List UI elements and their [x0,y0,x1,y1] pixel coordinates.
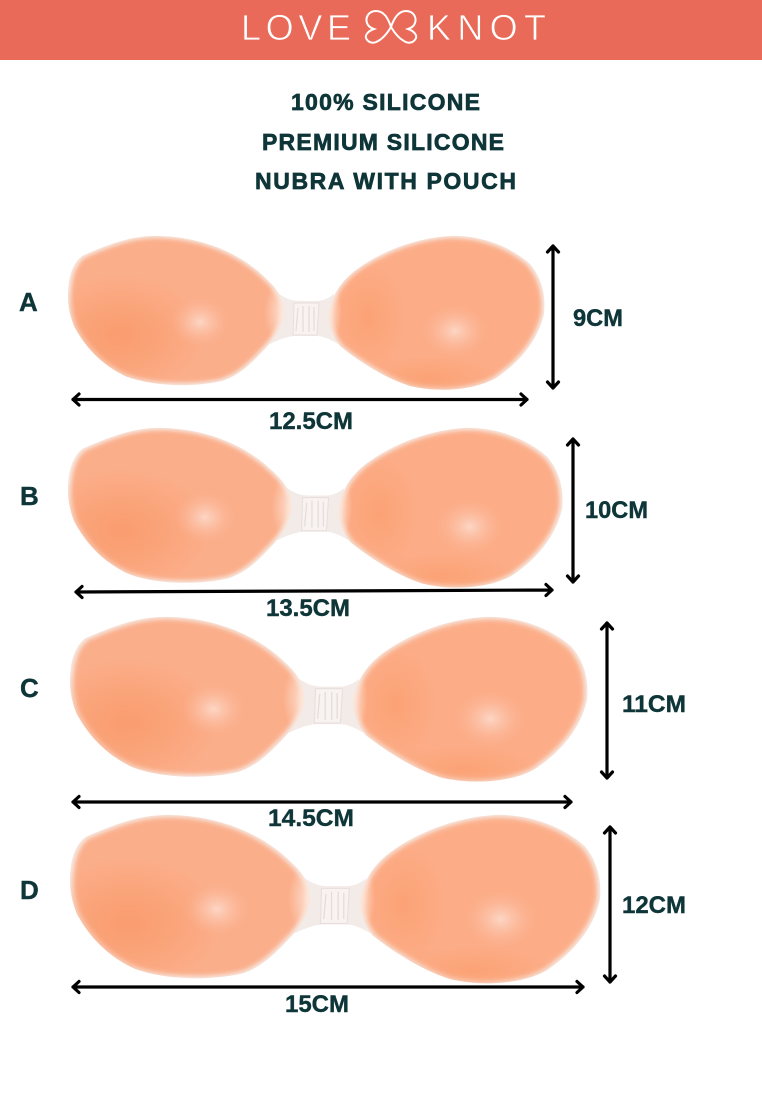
width label B: 13.5CM [266,595,350,622]
size row D [20,815,686,1018]
icon: love knot logo [366,11,416,43]
height label C: 11CM [622,691,686,718]
title line 3: NUBRA WITH POUCH [255,168,516,194]
width arrow A [73,394,527,405]
title line 1: 100% SILICONE [291,89,480,115]
product photo B [34,428,563,600]
width arrow D [73,982,583,992]
product photo C [34,617,587,795]
width arrow B [76,584,552,598]
height label A: 9CM [573,305,623,332]
title line 2: PREMIUM SILICONE [262,129,504,155]
size letter A: A [19,287,38,317]
size row B [20,428,648,622]
product photo D [33,815,600,997]
width label C: 14.5CM [268,805,354,832]
size letter B: B [20,481,39,511]
height arrow A [548,246,558,388]
logo word KNOT: KNOT [427,7,546,48]
height label B: 10CM [585,497,648,524]
height arrow D [604,827,616,982]
height label D: 12CM [622,892,686,919]
height arrow C [602,623,612,778]
product photo A [35,236,544,402]
header bar with logo [0,0,762,60]
logo word LOVE: LOVE [241,7,351,48]
size letter C: C [20,673,39,703]
width label D: 15CM [285,991,349,1018]
width label A: 12.5CM [269,408,353,435]
height arrow B [568,439,578,582]
title block [255,89,516,194]
size letter D: D [20,875,39,905]
size row A [19,236,623,435]
size row C [20,617,686,832]
width arrow C [73,796,571,808]
